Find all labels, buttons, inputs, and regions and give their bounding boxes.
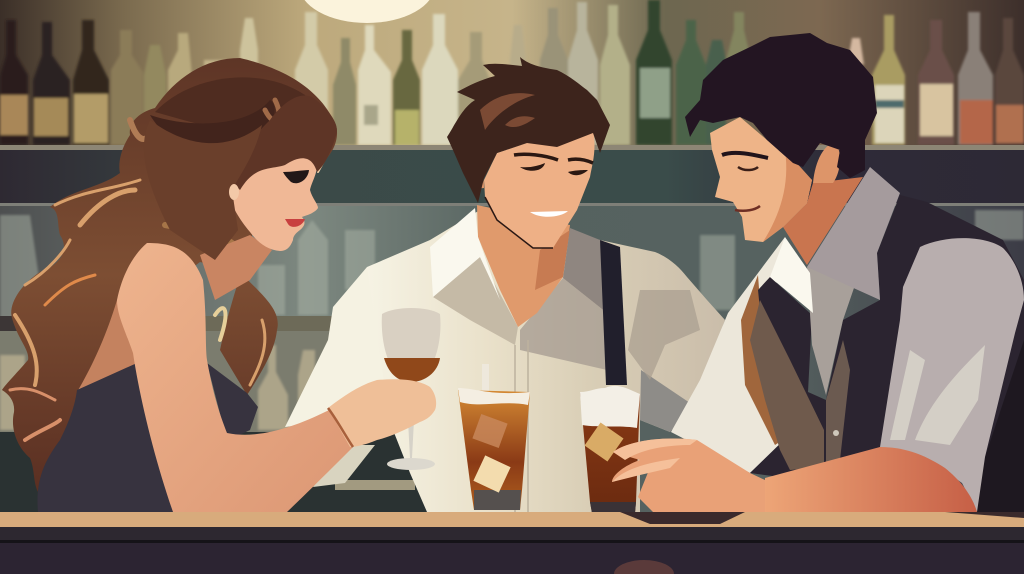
brows [514,154,593,163]
center man [367,57,725,512]
shelf band [0,145,1024,205]
mirrored lower back bar [0,205,1024,515]
sleeve [880,238,1024,512]
cola glass with straw [458,364,530,510]
neck [477,205,570,327]
vest brown panel [750,300,824,470]
hand on glass [612,438,765,512]
back wall [0,0,1024,150]
vest button [833,430,839,436]
mouth [735,206,760,211]
lips [285,219,305,227]
bottles on top shelf [0,0,1024,145]
smile [530,211,568,217]
hanging lamp [299,0,435,23]
ear [813,143,840,183]
sleeve highlights [890,345,985,445]
neck [200,235,272,300]
hair [685,33,877,178]
shirt collar area grey [433,257,518,345]
wine glass [382,308,440,470]
ear [463,156,484,188]
suspender [600,240,627,385]
forearm [765,447,977,512]
hair [447,57,610,203]
foamy glass [580,386,640,513]
fringe [225,96,337,190]
hair highlights [10,100,335,440]
woman [2,58,353,512]
lower shelf [0,316,340,331]
lower shelf glasses [0,331,330,433]
bar counter [0,512,1024,574]
back skin [77,300,150,420]
dress [37,363,173,512]
brow [722,153,768,158]
jaw line [485,197,553,248]
eyes [520,163,588,175]
face [710,117,812,242]
eye [283,170,309,183]
collar left [770,237,813,313]
vest [750,195,1024,477]
placket [515,340,528,512]
closed eye [738,167,758,170]
dark top-of-head sweep [155,77,312,145]
arm [117,243,353,512]
right man [671,33,1024,512]
collar right [807,167,900,300]
hair highlights [480,93,535,130]
lower dark cabinet [0,432,430,514]
dress front [207,363,258,441]
face [228,146,318,251]
inner grey shirt [807,267,855,395]
center man sleeve and under-arm [285,267,440,487]
hair back mass [2,58,337,492]
shirt [367,210,725,512]
hair front strand [144,120,262,260]
woman's hand holding glass [328,379,436,447]
collar right [563,228,607,313]
orange vest edge [741,275,787,445]
left shirt panel [671,237,787,473]
ear [229,184,239,200]
collar left [430,208,500,300]
face [484,130,595,248]
neck [783,177,863,265]
right man far dark edge [975,330,1024,514]
shirt grey shadow [640,370,693,432]
